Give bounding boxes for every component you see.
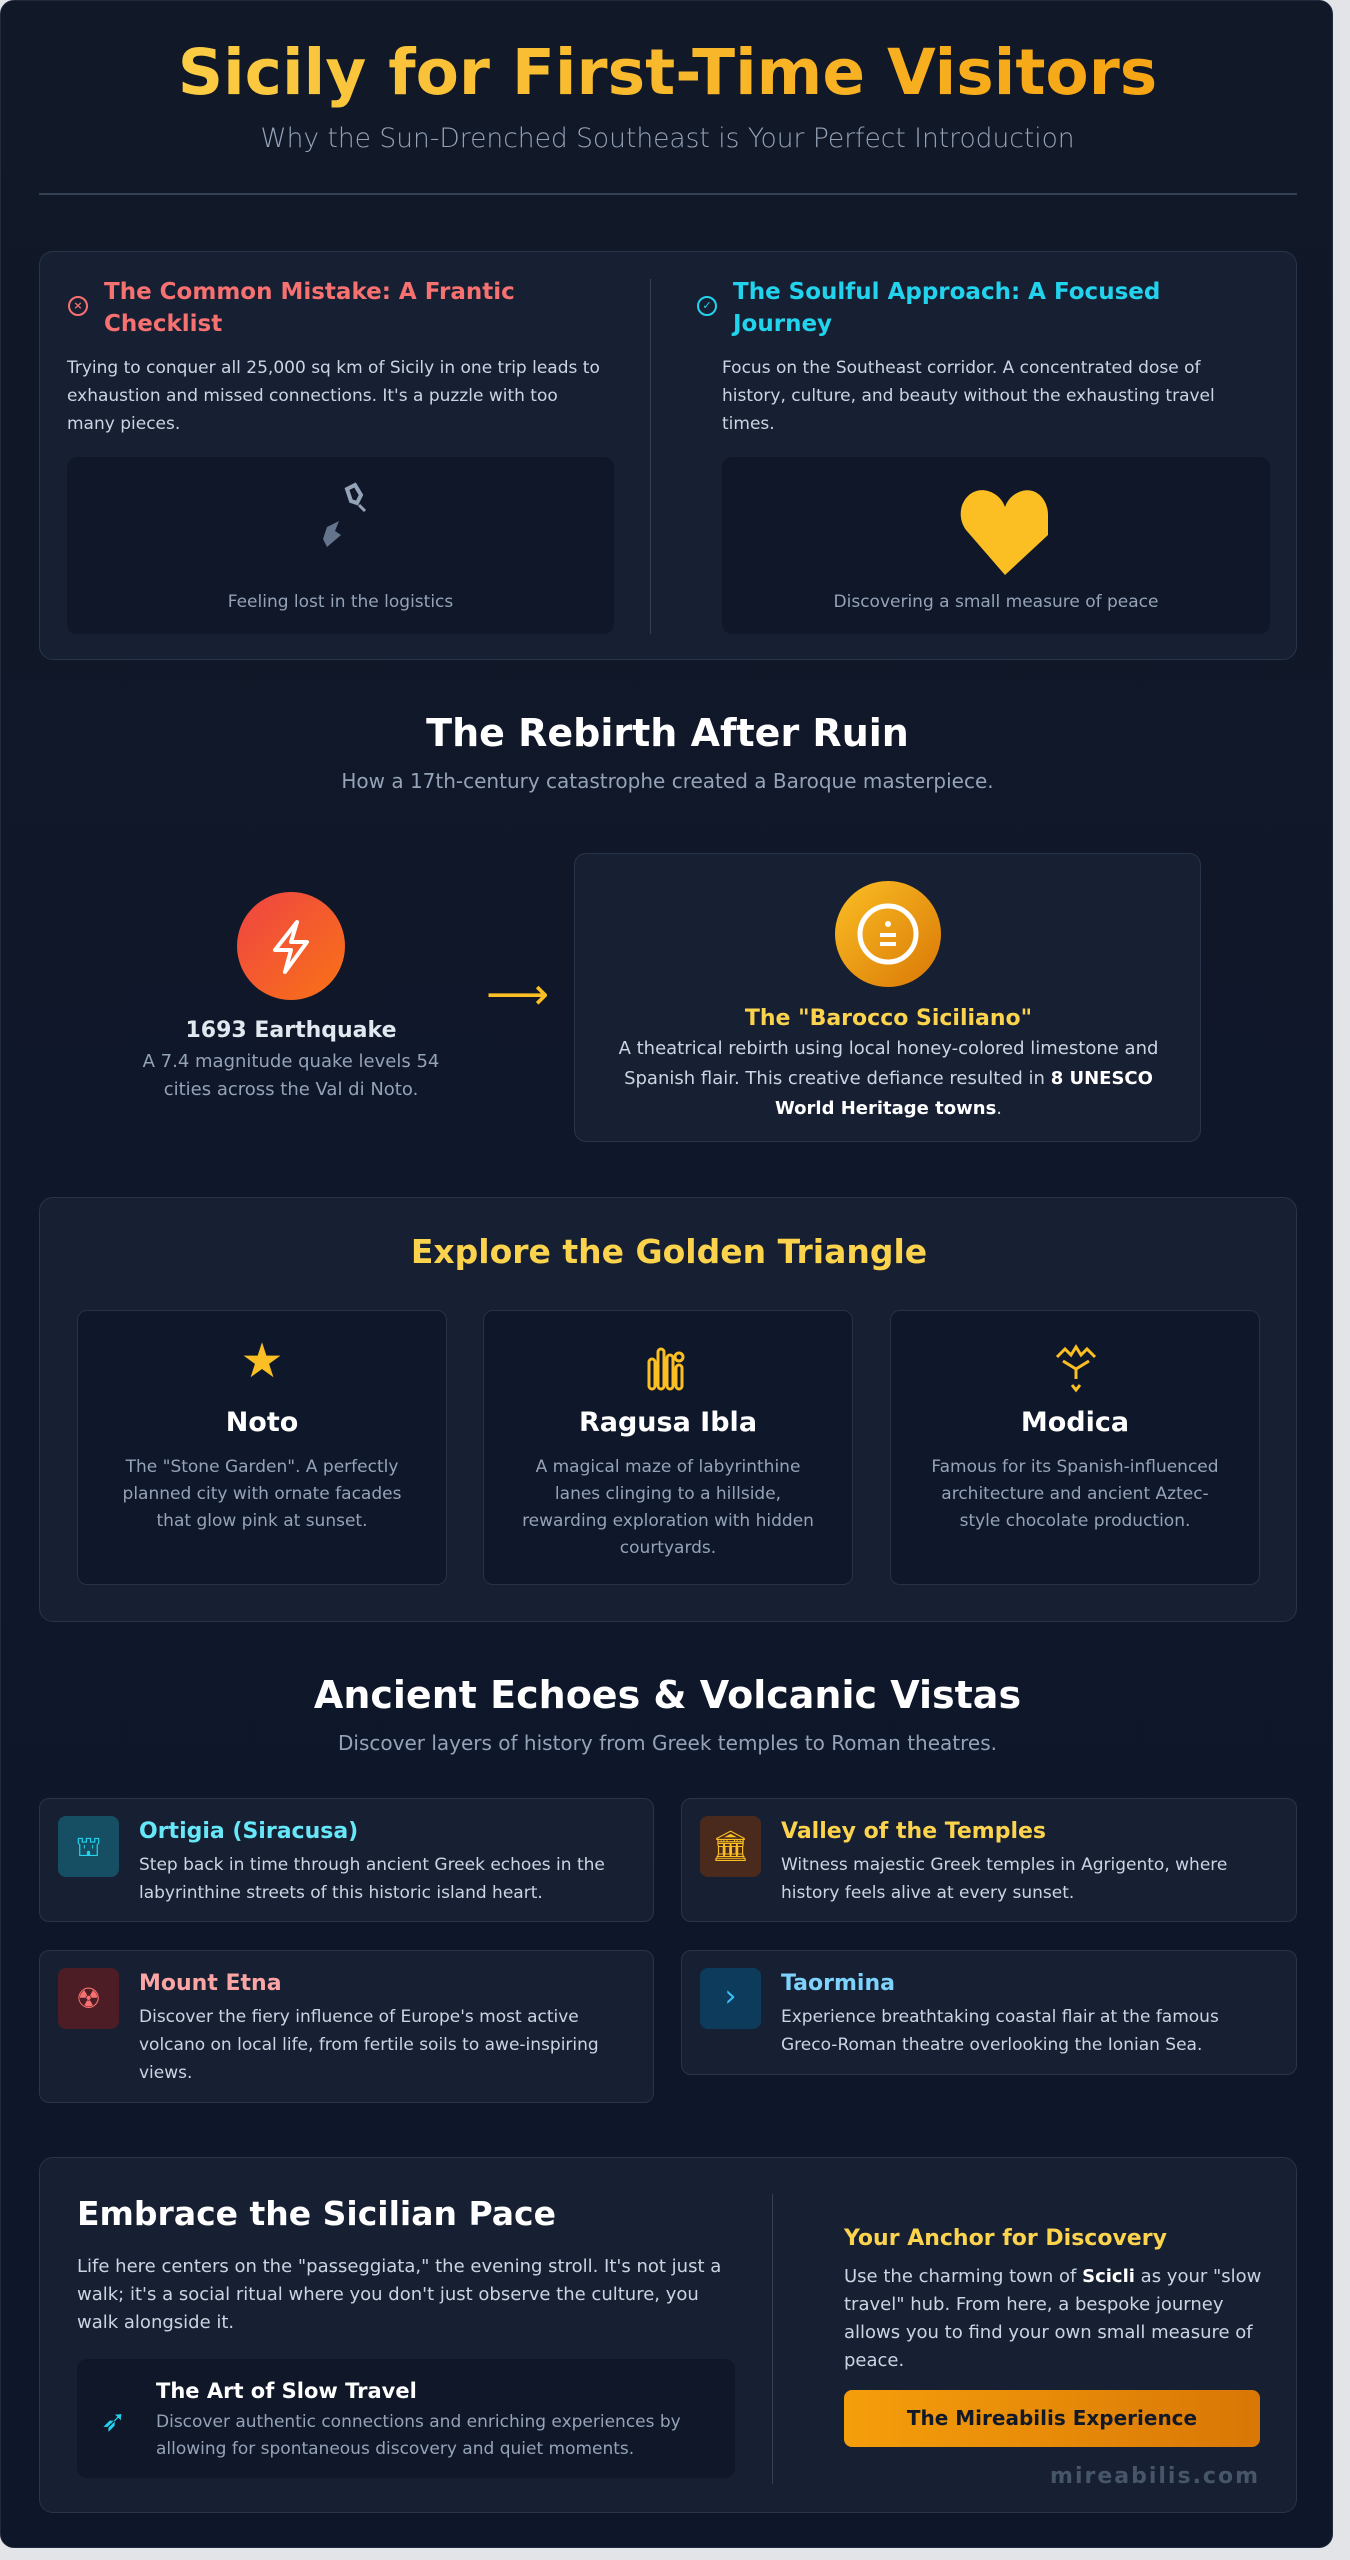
card: Valley of the Temples: Valley of the Temples (781, 1819, 1046, 1844)
text: mistake: Trying to conquer all 25,000 sq km of Sicily in one trip leads to exhaustion and missed connections. It's a puzzle with too many pieces. (67, 358, 600, 434)
card: Ortigia: Step back in time through ancient Greek echoes in the labyrinthine streets of this historic island heart. (139, 1855, 605, 1903)
button (844, 2390, 1260, 2447)
caption: Feeling lost in the logistics (228, 592, 453, 612)
box: slow travel (77, 2359, 735, 2478)
box: slow travel: Discover authentic connections and enriching experiences by allowing for spontaneous discovery and quiet moments. (156, 2412, 681, 2459)
card: Noto: The "Stone Garden". A perfectly planned city with ornate facades that glow pink at sunset. (123, 1457, 401, 1531)
card: Modica: Famous for its Spanish-influenced architecture and ancient Aztec-style chocolate production. (931, 1457, 1219, 1531)
text: Life here centers on the "passeggiata," the evening stroll. It's not just a walk; it's a social ritual where you don't just observe the culture, you walk alongside it. (77, 2256, 721, 2333)
heading: rebirth: The Rebirth After Ruin (426, 711, 909, 755)
image box: peace (722, 457, 1270, 634)
heading: common mistake: × (73, 299, 83, 312)
card: barocco: The "Barocco Siciliano" (745, 1006, 1032, 1031)
brand: mireabilis.com (1050, 2464, 1260, 2489)
icon: puzzle pieces (323, 482, 366, 547)
subtitle: Discover layers of history from Greek temples to Roman theatres. (338, 1731, 997, 1755)
card: Ragusa Ibla: A magical maze of labyrinthine lanes clinging to a hillside, rewarding exploration with hidden courtyards. (522, 1457, 814, 1558)
earthquake block (142, 892, 439, 1100)
card: barocco: A theatrical rebirth using local honey-colored limestone and Spanish flair. This creative defiance resulted in 8 UNESCO World Heritage towns. (619, 1038, 1158, 1119)
card: Ortigia: ⛫ (76, 1830, 101, 1863)
arrow: ⟶ (486, 969, 549, 1020)
caption: Discovering a small measure of peace (834, 592, 1158, 612)
card: Ragusa Ibla (483, 1310, 853, 1585)
card: Noto: Noto (226, 1407, 298, 1438)
heading: anchor: Your Anchor for Discovery (844, 2226, 1167, 2251)
earthquake block: 1693 Earthquake (185, 1018, 396, 1043)
panel: sicilian pace (39, 2157, 1297, 2513)
box: slow travel: The Art of Slow Travel (156, 2379, 417, 2403)
card: Modica: Modica (1021, 1407, 1129, 1438)
card: Ortigia: Ortigia (Siracusa) (139, 1819, 358, 1844)
card: Mount Etna: Discover the fiery influence of Europe's most active volcano on local life, from fertile soils to awe-inspiring views. (139, 2007, 599, 2083)
card: Valley of the Temples: 🏛 (711, 1829, 750, 1864)
heading: soulful approach: The Soulful Approach: A Focused Journey (733, 279, 1160, 337)
heading: ancient echoes: Ancient Echoes & Volcanic Vistas (314, 1673, 1021, 1717)
heading: soulful approach: ✓ (702, 299, 712, 312)
card: barocco (574, 853, 1201, 1142)
card: Ortigia (39, 1798, 654, 1922)
title: Sicily for First-Time Visitors (178, 36, 1157, 109)
card: Mount Etna (39, 1950, 654, 2103)
text: anchor: Use the charming town of Scicli as your "slow travel" hub. From here, a bespoke journey allows you to find your own small measure of peace. (844, 2266, 1261, 2371)
button: The Mireabilis Experience (907, 2406, 1197, 2430)
icon: lightning (237, 892, 345, 1000)
earthquake block: cities across the Val di Noto. (164, 1079, 418, 1100)
image box: lost (67, 457, 614, 634)
icon: heart (960, 490, 1048, 575)
card: Noto (77, 1310, 447, 1585)
panel: mistake vs approach (39, 251, 1297, 660)
card: Noto: ★ (240, 1333, 284, 1389)
heading: Embrace the Sicilian Pace (77, 2194, 556, 2233)
subtitle: rebirth: How a 17th-century catastrophe created a Baroque masterpiece. (341, 769, 994, 793)
heading: common mistake: The Common Mistake: A Frantic Checklist (104, 279, 515, 337)
card: Modica (890, 1310, 1260, 1585)
card: Valley of the Temples (681, 1798, 1297, 1922)
card: Valley of the Temples: Witness majestic Greek temples in Agrigento, where history feels alive at every sunset. (781, 1855, 1227, 1903)
title (1, 33, 1334, 113)
panel: golden triangle (39, 1197, 1297, 1622)
card: Taormina (681, 1950, 1297, 2075)
card: Taormina: Taormina (781, 1971, 895, 1996)
text: approach: Focus on the Southeast corridor. A concentrated dose of history, culture, and beauty without the exhausting travel times. (722, 358, 1215, 434)
heading: Explore the Golden Triangle (411, 1232, 927, 1271)
card: Mount Etna: ☢ (76, 1982, 101, 2015)
subtitle: Why the Sun-Drenched Southeast is Your Perfect Introduction (260, 123, 1075, 154)
icon: barocco (835, 881, 941, 987)
card: Taormina: Experience breathtaking coastal flair at the famous Greco-Roman theatre overlooking the Ionian Sea. (781, 2007, 1219, 2055)
card: Taormina: › (724, 1979, 736, 2014)
card: Ragusa Ibla: Ragusa Ibla (579, 1407, 757, 1438)
earthquake block: A 7.4 magnitude quake levels 54 (143, 1051, 439, 1072)
box: slow travel: ➶ (101, 2404, 126, 2439)
card: Mount Etna: Mount Etna (139, 1971, 282, 1996)
